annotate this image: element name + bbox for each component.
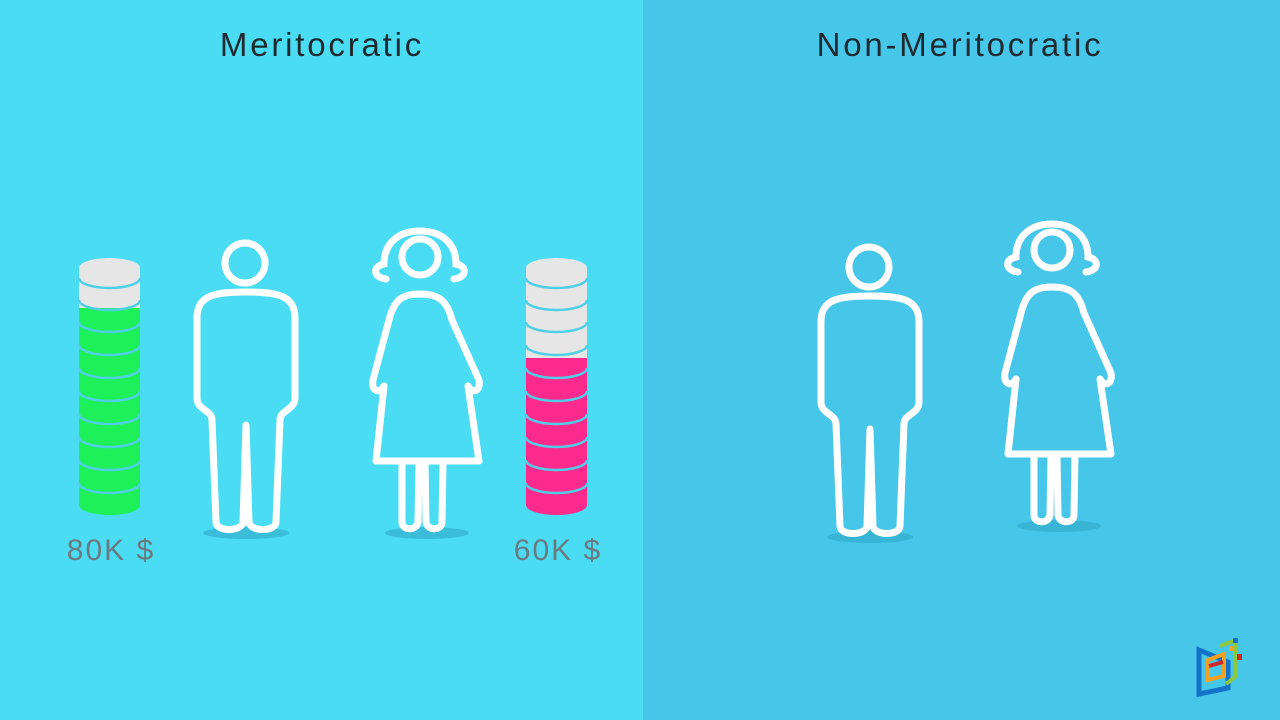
panel: meritocratic — [0, 0, 643, 720]
icon: woman (meritocratic) — [373, 231, 479, 539]
coin stack: green 80K — [79, 258, 140, 515]
label: 80K $: 80K $ — [67, 534, 155, 567]
icon: man (meritocratic) — [197, 243, 295, 539]
icon: logo — [1199, 638, 1242, 694]
title: meritocratic: Meritocratic — [220, 26, 424, 63]
icon: man (non-meritocratic) — [821, 247, 919, 543]
panel: non-meritocratic — [643, 0, 1280, 720]
coin stack: pink 60K — [526, 258, 587, 515]
title: non-meritocratic: Non-Meritocratic — [817, 26, 1103, 63]
icon: woman (non-meritocratic) — [1005, 224, 1111, 532]
label: 60K $: 60K $ — [514, 534, 602, 567]
